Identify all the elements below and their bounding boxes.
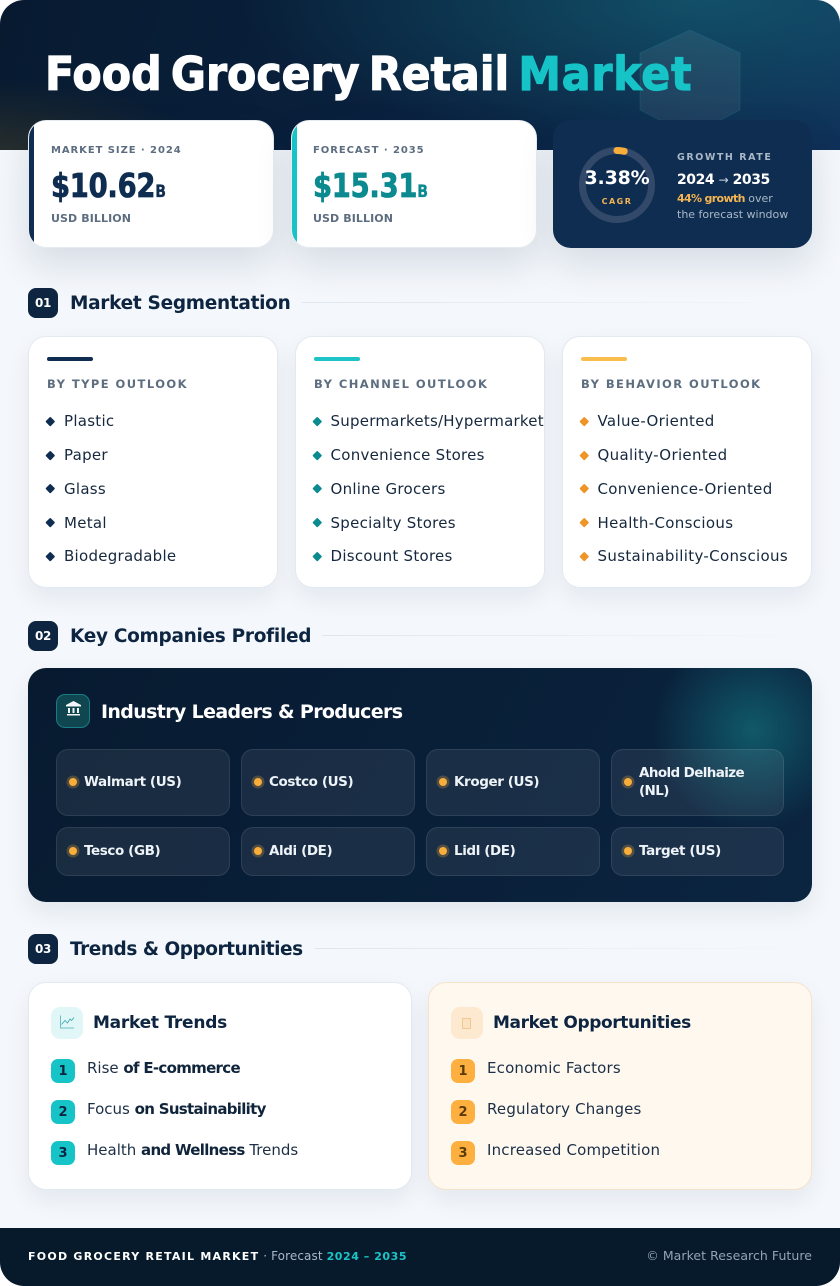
panel accent: behavior [581,357,627,361]
chip: Costco [241,749,415,816]
list item 1 [51,1059,240,1083]
list: behavior: Health-Conscious [598,514,733,532]
list item 1: Rise of E-commerce [87,1059,240,1077]
panel accent: type [47,357,93,361]
section 01 badge: 01 [35,296,51,310]
list: channel [312,412,544,565]
list: type: Glass [64,480,106,498]
list: behavior: Sustainability-Conscious [598,547,788,565]
list: channel: Specialty Stores [330,514,456,532]
CAGR label: CAGR [602,197,632,206]
title: Food Grocery Retail Market [45,47,692,101]
list: type: Paper [64,446,108,464]
heading: Market Opportunities [493,1013,691,1033]
list item 3 [451,1141,660,1165]
list item 2 [51,1100,266,1124]
list item 3: 3 [58,1146,68,1161]
growth note: the forecast window [677,208,788,221]
list: channel: Supermarkets/Hypermarket [330,412,544,430]
panel heading: behavior: BY BEHAVIOR OUTLOOK [581,377,762,391]
list: type: Metal [64,514,107,532]
stat card: growth rate [553,120,812,248]
list item 2 [451,1100,642,1124]
section 02 badge: 02 [35,629,51,643]
list item 2: Regulatory Changes [487,1100,642,1118]
panel: by behavior [562,336,812,588]
value: $10.62B [51,166,166,205]
list item 2: 2 [58,1105,68,1120]
stat card: forecast [291,120,537,248]
list item 3: 3 [458,1146,468,1161]
stat card: market size [28,120,274,248]
chip: Tesco: Tesco (GB) [84,843,160,859]
chip: Ahold Delhaize [611,749,784,816]
list item 3: Health and Wellness Trends [87,1141,298,1159]
list item 2: 2 [458,1105,468,1120]
label: MARKET SIZE · 2024 [51,145,182,156]
list: type: Biodegradable [64,547,176,565]
panel: market trends [28,982,412,1190]
list item 1: 1 [58,1064,68,1079]
section 01 badge [28,288,58,318]
panel heading: channel: BY CHANNEL OUTLOOK [314,377,488,391]
footer [0,1228,840,1286]
chip: Lidl [426,827,600,876]
growth period: 2024 → 2035 [677,172,770,188]
panel heading: type: BY TYPE OUTLOOK [47,377,188,391]
chip: Ahold Delhaize: Ahold Delhaize [639,765,744,781]
panel: market opportunities [428,982,812,1190]
list item 1 [451,1059,621,1083]
list item 1: 1 [458,1064,468,1079]
section 02 badge [28,621,58,651]
list: behavior [580,412,788,565]
decorative hexagon [640,30,740,120]
icon: missing glyph box [451,1007,483,1039]
section 03 heading: Trends & Opportunities [70,939,303,960]
CAGR value: 3.38% [585,167,649,189]
growth label: GROWTH RATE [677,152,772,163]
unit: USD BILLION [313,212,393,225]
list item 2: Focus on Sustainability [87,1100,266,1118]
list item 3 [51,1141,298,1165]
footer source: © Market Research Future [646,1248,812,1263]
panel heading: Industry Leaders & Producers [101,701,402,723]
section 01 heading: Market Segmentation [70,293,290,314]
chip: Target [611,827,784,876]
list: type: Plastic [64,412,114,430]
list: channel: Convenience Stores [330,446,485,464]
accent bar [28,120,34,250]
chip: Target: Target (US) [639,843,721,859]
chip: Walmart [56,749,230,816]
accent bar [291,120,297,250]
list: channel: Online Grocers [330,480,446,498]
list item 3: Increased Competition [487,1141,660,1159]
panel: by channel [295,336,545,588]
chip: Ahold Delhaize: (NL) [639,783,669,799]
icon: institution [56,694,90,728]
unit: USD BILLION [51,212,131,225]
list: behavior: Quality-Oriented [598,446,727,464]
chip: Aldi: Aldi (DE) [269,843,332,859]
footer title: FOOD GROCERY RETAIL MARKET · Forecast 2024 – 2035 [28,1249,407,1263]
section 03 badge: 03 [35,942,51,956]
panel accent: channel [314,357,360,361]
list: behavior: Convenience-Oriented [598,480,773,498]
header band [0,0,840,150]
chip: Tesco [56,827,230,876]
chip: Kroger: Kroger (US) [454,774,539,790]
chip: Kroger [426,749,600,816]
heading: Market Trends [93,1013,227,1033]
list: channel: Discount Stores [330,547,453,565]
icon: chart [51,1007,83,1039]
panel: by type [28,336,278,588]
list: behavior: Value-Oriented [598,412,715,430]
growth note: 44% growth over [677,192,773,205]
list item 1: Economic Factors [487,1059,621,1077]
chip: Walmart: Walmart (US) [84,774,181,790]
section 02 heading: Key Companies Profiled [70,626,311,647]
chip: Lidl: Lidl (DE) [454,843,515,859]
label: FORECAST · 2035 [313,145,425,156]
section 03 badge [28,934,58,964]
chip: Aldi [241,827,415,876]
value: $15.31B [313,166,428,205]
growth note [677,192,788,221]
CAGR ring [579,147,655,223]
chip: Costco: Costco (US) [269,774,353,790]
list: type [46,412,176,565]
panel: companies [28,668,812,902]
